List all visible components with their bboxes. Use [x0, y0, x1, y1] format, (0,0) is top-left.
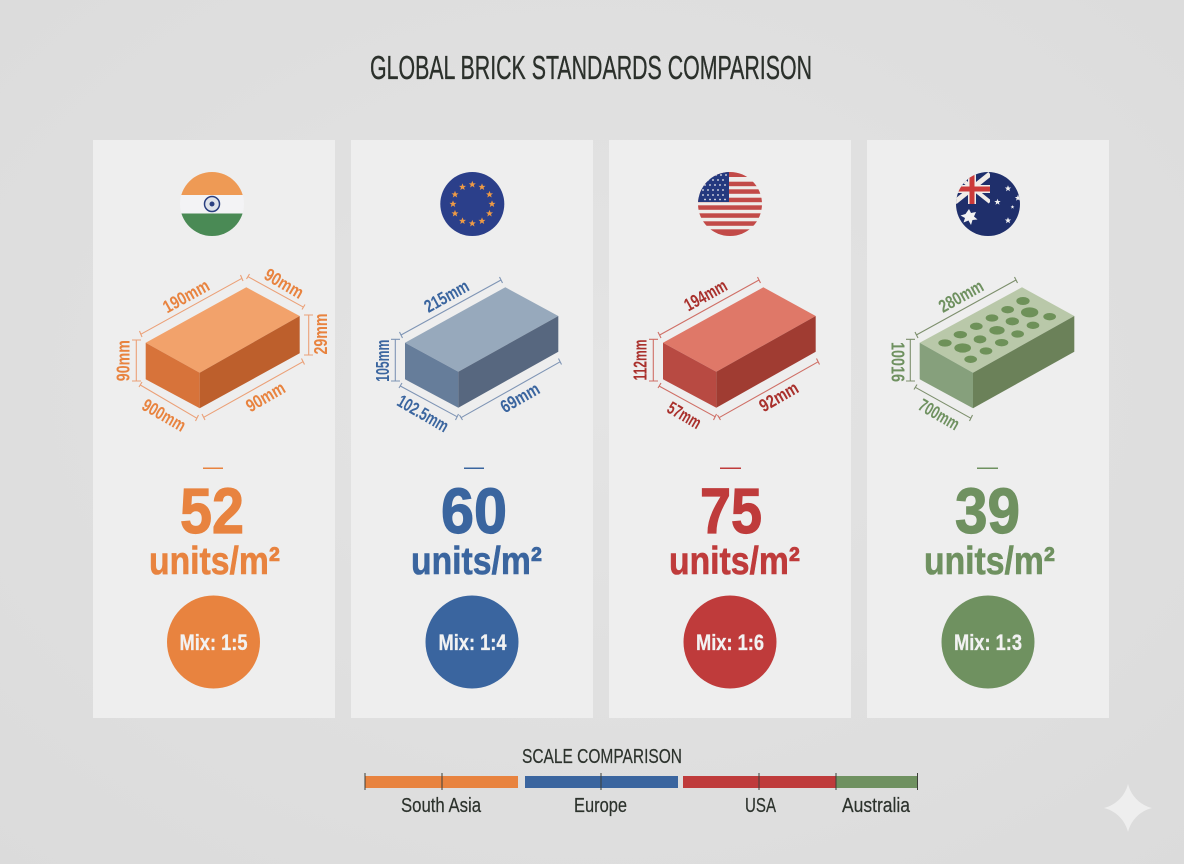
brick count: 75: [700, 475, 762, 547]
accent dash: [203, 468, 223, 469]
panel: USA: [609, 140, 851, 718]
dimension labels: 92mm: [756, 378, 802, 416]
dimension lines: [649, 277, 820, 420]
scale labels: Europe: [574, 795, 627, 817]
dimension lines: [906, 277, 1018, 421]
dimension lines: [391, 277, 562, 420]
accent dash: [464, 468, 484, 469]
scale heading: SCALE COMPARISON: [522, 746, 682, 768]
unit: units/m²: [411, 540, 542, 583]
mortar mix badge: Mix: 1:4: [438, 630, 507, 655]
dimension lines: [132, 274, 313, 421]
dimension labels: 190mm: [159, 275, 213, 317]
brick: USA: [663, 287, 816, 408]
dimension labels: 280mm: [935, 276, 987, 317]
scale bar: [365, 773, 918, 790]
dimension labels: [888, 276, 987, 434]
dimension labels: 215mm: [421, 276, 472, 317]
dimension labels: 900mm: [139, 395, 189, 436]
panel: Europe: [351, 140, 593, 718]
dimension labels: 90mm: [261, 264, 307, 303]
unit: units/m²: [924, 540, 1055, 583]
brick: South Asia: [146, 287, 300, 408]
mortar mix badge: [942, 596, 1034, 688]
unit: units/m²: [149, 540, 280, 583]
brick: Europe: [405, 287, 558, 408]
mortar mix badge: Mix: 1:6: [696, 630, 764, 655]
dimension labels: 112mm: [630, 340, 650, 380]
dimension labels: 57mm: [664, 398, 705, 433]
panel: Australia: [867, 140, 1109, 718]
brick count: 39: [955, 475, 1020, 547]
mortar mix badge: Mix: 1:3: [954, 630, 1022, 655]
scale labels: South Asia: [401, 795, 482, 817]
dimension labels: [630, 275, 802, 433]
scale labels: USA: [745, 795, 776, 817]
dimension labels: 29mm: [311, 314, 331, 354]
brick perforations: [938, 297, 1056, 363]
mortar mix badge: Mix: 1:5: [180, 630, 248, 655]
mortar mix badge: [684, 596, 776, 688]
title: GLOBAL BRICK STANDARDS COMPARISON: [370, 49, 812, 86]
brick count: 60: [441, 475, 507, 547]
dimension labels: 194mm: [681, 275, 731, 315]
scale comparison: [365, 746, 918, 817]
icon: USA flag: [698, 172, 762, 236]
dimension labels: 69mm: [497, 379, 543, 417]
mortar mix badge: [167, 596, 260, 688]
panel: South Asia: [93, 140, 335, 718]
accent dash: [977, 468, 998, 469]
icon: EU flag: [440, 172, 504, 236]
dimension labels: [114, 264, 331, 436]
dimension labels: 700mm: [915, 395, 963, 434]
icon: India flag: [180, 172, 244, 236]
dimension labels: 102.5mm: [394, 391, 452, 436]
dimension labels: [373, 276, 543, 436]
icon: sparkle watermark: [1104, 784, 1152, 832]
scale labels: [401, 795, 911, 817]
brick count: 52: [180, 475, 244, 547]
dimension labels: 10016: [888, 342, 908, 382]
icon: Australia flag: [955, 172, 1021, 236]
brick: Australia: [920, 287, 1074, 408]
accent dash: [720, 468, 741, 469]
dimension labels: 90mm: [242, 378, 289, 416]
mortar mix badge: [426, 596, 518, 688]
unit: units/m²: [669, 540, 800, 583]
dimension labels: 90mm: [114, 340, 134, 381]
scale labels: Australia: [842, 795, 911, 817]
dimension labels: 105mm: [373, 340, 393, 382]
